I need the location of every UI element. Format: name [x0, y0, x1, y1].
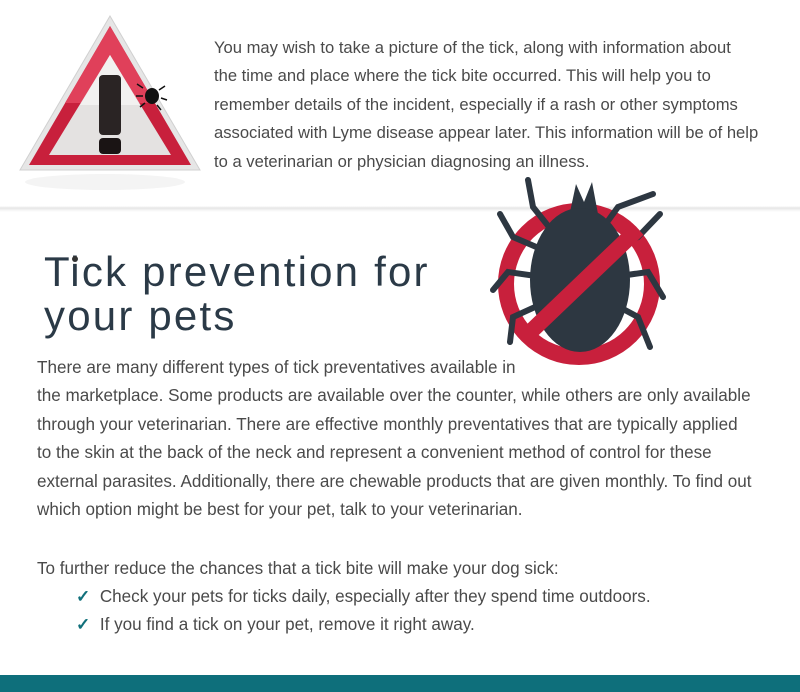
check item 2: ✓ If you find a tick on your pet, remove it right away.: [76, 615, 475, 634]
heading: Tick prevention for: [44, 248, 430, 295]
checklist: [76, 587, 651, 634]
icon: tiny tick on heading i: [72, 256, 78, 262]
text block: prevention paragraph: There are many different types of tick preventatives available in: [37, 358, 516, 377]
text block: intro paragraph: remember details of the incident, especially if a rash or other symptoms: [214, 95, 738, 114]
divider: [0, 206, 800, 212]
text block: prevention paragraph: [37, 358, 752, 519]
text block: intro paragraph: You may wish to take a picture of the tick, along with information about: [214, 38, 731, 57]
text block: prevention paragraph: through your veterinarian. There are effective monthly preventatives that are typically applied: [37, 415, 738, 434]
text block: intro paragraph: the time and place where the tick bite occurred. This will help you to: [214, 66, 711, 85]
text block: intro paragraph: associated with Lyme disease appear later. This information will be of help: [214, 123, 758, 142]
check item 1: ✓ Check your pets for ticks daily, especially after they spend time outdoors.: [76, 587, 651, 606]
footer bar: [0, 675, 800, 692]
icon: warning triangle with tick: [19, 15, 201, 190]
text block: prevention paragraph: to the skin at the back of the neck and represent a convenient method of control for these: [37, 443, 712, 462]
heading: your pets: [44, 292, 237, 339]
text block: further reduce: To further reduce the chances that a tick bite will make your dog sick:: [37, 559, 559, 578]
text block: prevention paragraph: which option might be best for your pet, talk to your veterinarian.: [37, 500, 523, 519]
icon: small tick on triangle: [136, 84, 167, 110]
text block: intro paragraph: [214, 38, 758, 171]
icon: no ticks sign: [490, 177, 666, 365]
heading: [44, 248, 430, 339]
text block: prevention paragraph: the marketplace. Some products are available over the counter, while others are only available: [37, 386, 751, 405]
text block: intro paragraph: to a veterinarian or physician diagnosing an illness.: [214, 152, 589, 171]
text block: prevention paragraph: external parasites. Additionally, there are chewable products that are given monthly. To find out: [37, 472, 752, 491]
